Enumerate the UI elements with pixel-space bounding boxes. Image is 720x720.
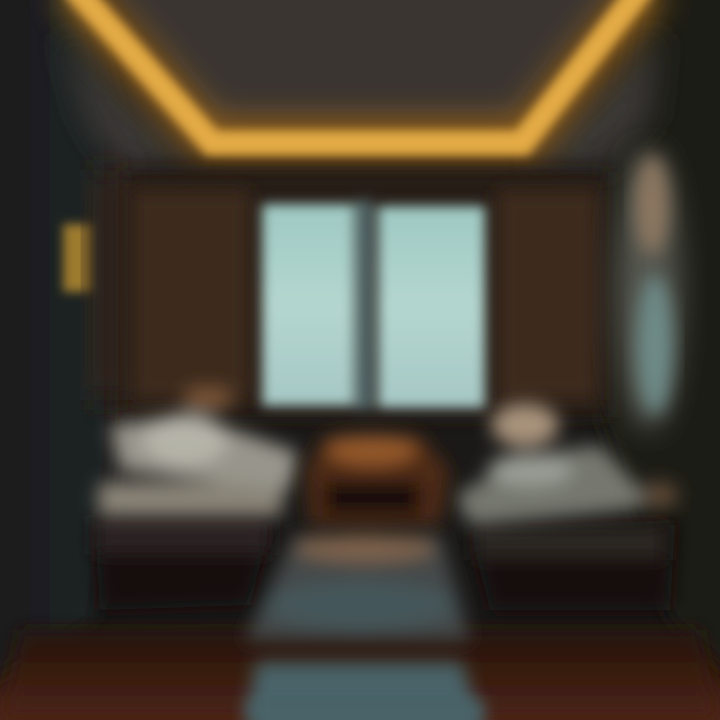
- ceiling gold light glow: [70, 0, 650, 140]
- left sofa cushions: [98, 386, 298, 516]
- floor window reflection lower edge: [250, 690, 482, 720]
- left wall: [0, 0, 140, 700]
- rug: [245, 534, 470, 640]
- window: [262, 200, 485, 410]
- right wall: [600, 0, 720, 700]
- ceiling gold light strip: [72, 0, 644, 143]
- wall mirror highlights: [635, 155, 673, 415]
- left curtain: [132, 190, 250, 400]
- left sofa arm and side: [95, 515, 270, 555]
- floor: [0, 630, 720, 720]
- right sofa cushions: [455, 403, 678, 525]
- left wall panel strip: [92, 170, 120, 400]
- wall mirror: [616, 150, 680, 430]
- ceiling centre panel: [90, 0, 635, 125]
- floor window reflection: [246, 662, 480, 720]
- right curtain: [497, 190, 597, 400]
- coffee table: [305, 435, 450, 525]
- back wall: [115, 172, 610, 417]
- right sofa base: [470, 520, 675, 610]
- right sofa arm and side: [475, 525, 665, 560]
- left sofa base: [95, 525, 270, 610]
- ceiling side panels: [60, 30, 660, 170]
- wall sconce: [63, 224, 93, 292]
